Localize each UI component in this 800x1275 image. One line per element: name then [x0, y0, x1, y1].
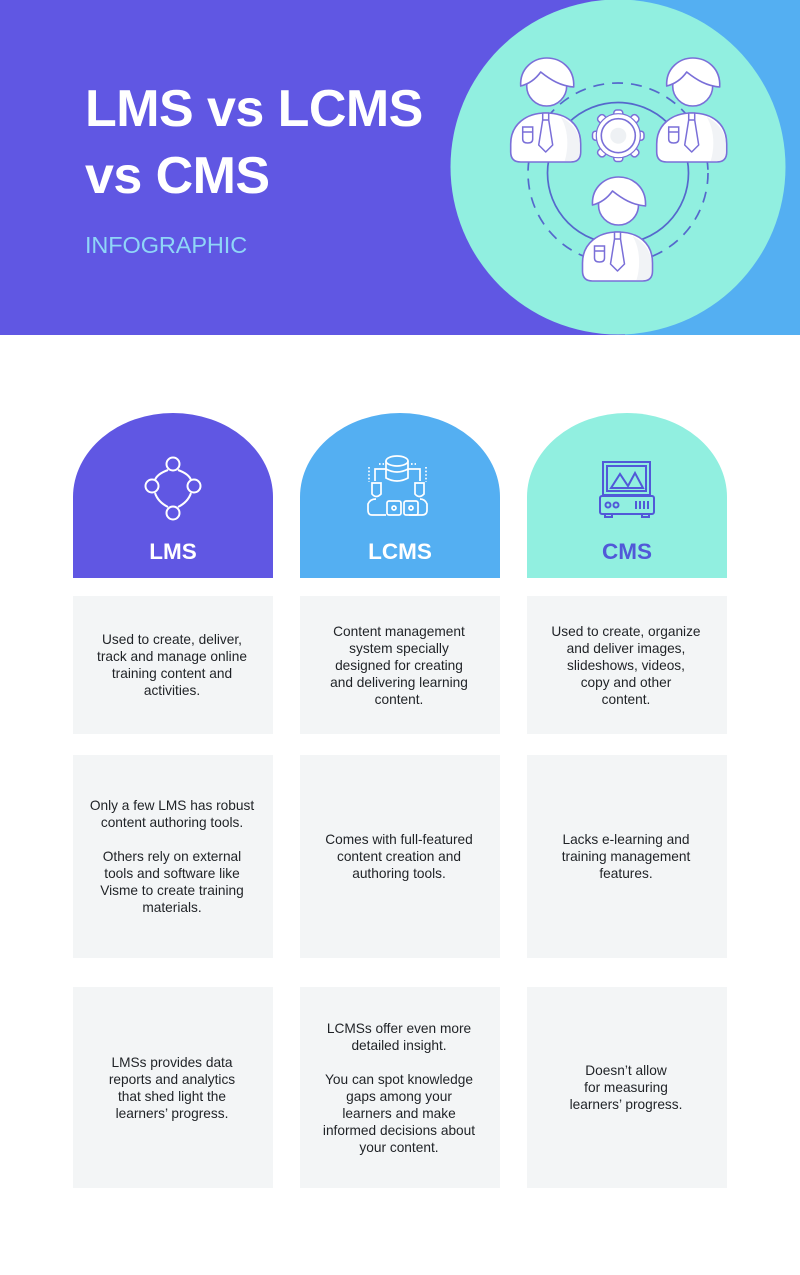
card: LCMS analytics: informed decisions about — [323, 1122, 475, 1138]
mint circle — [450, 0, 786, 334]
card: CMS analytics: Doesn’t allow — [585, 1063, 667, 1078]
icon: picture monitor on device — [599, 461, 655, 518]
card: LMS purpose — [73, 596, 273, 734]
card: LCMS analytics: You can spot knowledge — [325, 1072, 473, 1086]
card: LMS authoring: Visme to create training — [100, 883, 244, 898]
card: LMS analytics: LMSs provides data — [112, 1054, 232, 1070]
column header: LCMS — [300, 413, 500, 578]
card: CMS purpose: and deliver images, — [567, 640, 685, 656]
label: LMS — [149, 539, 197, 564]
card: LMS authoring: content authoring tools. — [101, 815, 243, 830]
card: CMS authoring — [527, 755, 727, 958]
title — [85, 80, 423, 205]
card: LCMS analytics: detailed insight. — [351, 1038, 447, 1052]
card: LCMS analytics — [300, 987, 500, 1188]
card: LMS authoring: tools and software like — [104, 866, 240, 881]
card: CMS authoring: features. — [599, 866, 653, 881]
label: LCMS — [368, 539, 432, 564]
card: LMS analytics: that shed light the — [118, 1088, 226, 1104]
person left — [511, 58, 581, 162]
card: CMS authoring: Lacks e-learning and — [562, 832, 690, 847]
card: LCMS analytics: gaps among your — [346, 1088, 452, 1104]
card: LMS authoring: Others rely on external — [103, 849, 241, 864]
blue corner panel — [625, 0, 800, 335]
card: LCMS analytics: LCMSs offer even more — [327, 1020, 471, 1036]
card: CMS authoring: training management — [562, 849, 690, 864]
card: LMS purpose: Used to create, deliver, — [102, 632, 242, 647]
dashed orbit — [528, 83, 708, 263]
person right — [657, 58, 727, 162]
card: LMS purpose: activities. — [144, 683, 200, 698]
card: CMS analytics — [527, 987, 727, 1188]
card: CMS purpose — [527, 596, 727, 734]
card: LMS purpose: training content and — [112, 666, 232, 681]
card: LMS analytics — [73, 987, 273, 1188]
card: LCMS purpose: designed for creating — [335, 658, 463, 672]
icon: database and two users — [367, 455, 428, 516]
card: LCMS authoring: authoring tools. — [352, 866, 446, 881]
header banner — [0, 0, 800, 335]
card: LMS authoring: Only a few LMS has robust — [90, 798, 254, 813]
subtitle: INFOGRAPHIC — [85, 232, 247, 258]
card: CMS purpose: slideshows, videos, — [567, 658, 685, 672]
label: CMS — [602, 539, 652, 564]
solid orbit — [548, 102, 688, 244]
card: LMS analytics: reports and analytics — [109, 1072, 235, 1086]
illustration: team around gear — [450, 0, 786, 334]
gear icon — [592, 110, 644, 162]
card: CMS purpose: Used to create, organize — [551, 624, 701, 638]
card: CMS purpose: copy and other — [581, 674, 671, 690]
card: LCMS purpose: content. — [375, 692, 423, 706]
card: LCMS purpose — [300, 596, 500, 734]
card: LCMS analytics: learners and make — [342, 1106, 456, 1120]
card: CMS analytics: for measuring — [584, 1080, 668, 1095]
card: LCMS authoring: content creation and — [337, 849, 461, 864]
person bottom — [582, 177, 652, 281]
card: CMS purpose: content. — [602, 692, 650, 706]
title: LMS vs LCMS — [85, 80, 423, 138]
card: LCMS purpose: system specially — [349, 640, 449, 656]
card: LCMS authoring — [300, 755, 500, 958]
title: vs CMS — [85, 147, 270, 205]
card: LCMS purpose: Content management — [333, 624, 465, 638]
card: LMS purpose: track and manage online — [97, 649, 247, 664]
card: LMS authoring: materials. — [142, 900, 202, 915]
column header: LMS — [73, 413, 273, 578]
card: LCMS purpose: and delivering learning — [330, 674, 468, 690]
icon: connected nodes — [144, 456, 202, 520]
card: LCMS analytics: your content. — [359, 1140, 439, 1154]
card: LMS analytics: learners’ progress. — [116, 1106, 228, 1120]
card: LMS authoring — [73, 755, 273, 958]
column header: CMS — [527, 413, 727, 578]
card: CMS analytics: learners’ progress. — [570, 1097, 682, 1112]
card: LCMS authoring: Comes with full-featured — [325, 832, 473, 847]
